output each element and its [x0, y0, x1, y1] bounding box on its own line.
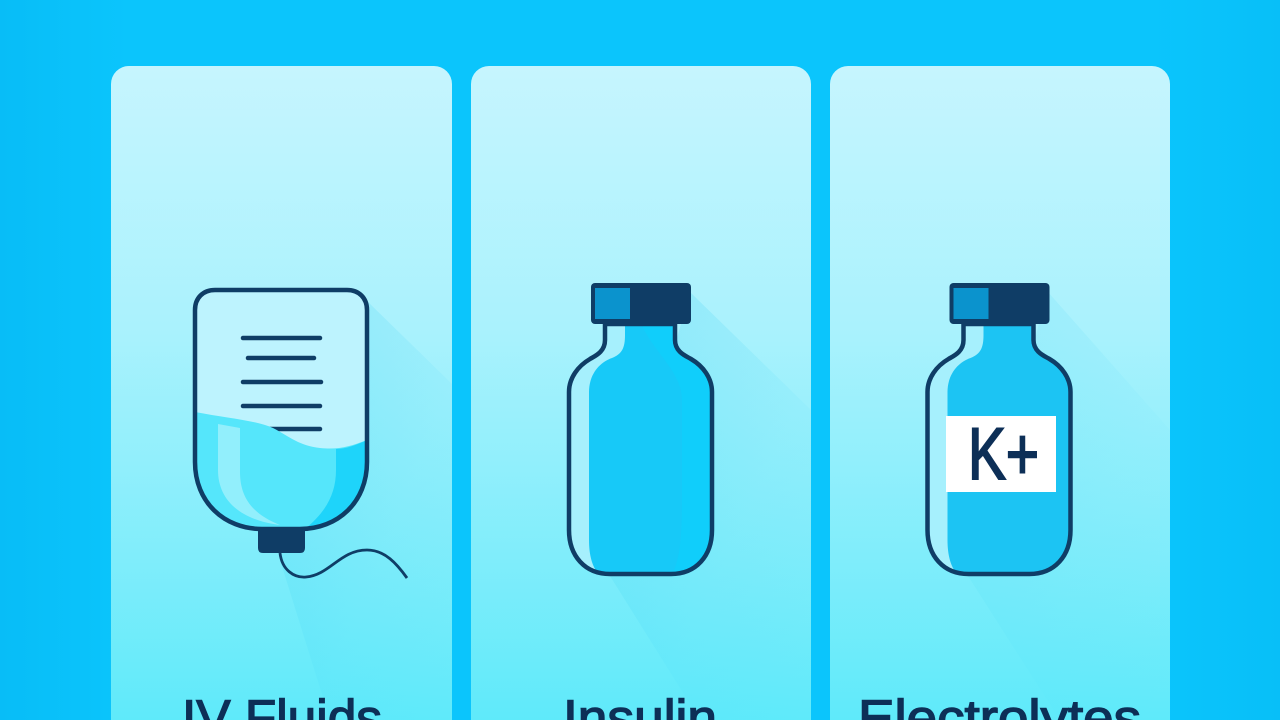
bag connector [258, 530, 305, 553]
bag body [195, 290, 367, 529]
long shadow: insulin bottle [610, 293, 788, 618]
bottle cap [591, 283, 691, 324]
bag tube [280, 550, 407, 578]
panel card: Insulin [471, 66, 811, 720]
bag liquid [197, 412, 365, 527]
bag outline [195, 290, 367, 529]
long shadow: IV bag [282, 302, 442, 622]
bottle glass [928, 324, 1070, 574]
bag label lines [243, 338, 321, 429]
bottle outline [569, 324, 712, 574]
bottle liquid [589, 320, 716, 580]
cap highlight [595, 288, 630, 319]
icon: IV bag [190, 290, 407, 578]
bottle cap [950, 283, 1050, 324]
bottle outline [928, 324, 1070, 574]
label text: K+: K+ [968, 414, 1039, 495]
panel card: Electrolytes [830, 66, 1170, 720]
panel: IV Fluids [111, 66, 452, 720]
panel card: IV Fluids [111, 66, 452, 720]
icon: electrolyte bottle [928, 283, 1074, 580]
bottle label [946, 416, 1056, 492]
panel: Electrolytes [830, 66, 1170, 720]
bottle body group [928, 283, 1074, 580]
bottle liquid [948, 320, 1074, 580]
bottle glass [569, 324, 712, 574]
long shadow: electrolyte bottle [1036, 294, 1106, 410]
panel: Insulin [471, 66, 811, 720]
cap highlight [954, 288, 988, 319]
icon: insulin bottle [569, 283, 716, 580]
